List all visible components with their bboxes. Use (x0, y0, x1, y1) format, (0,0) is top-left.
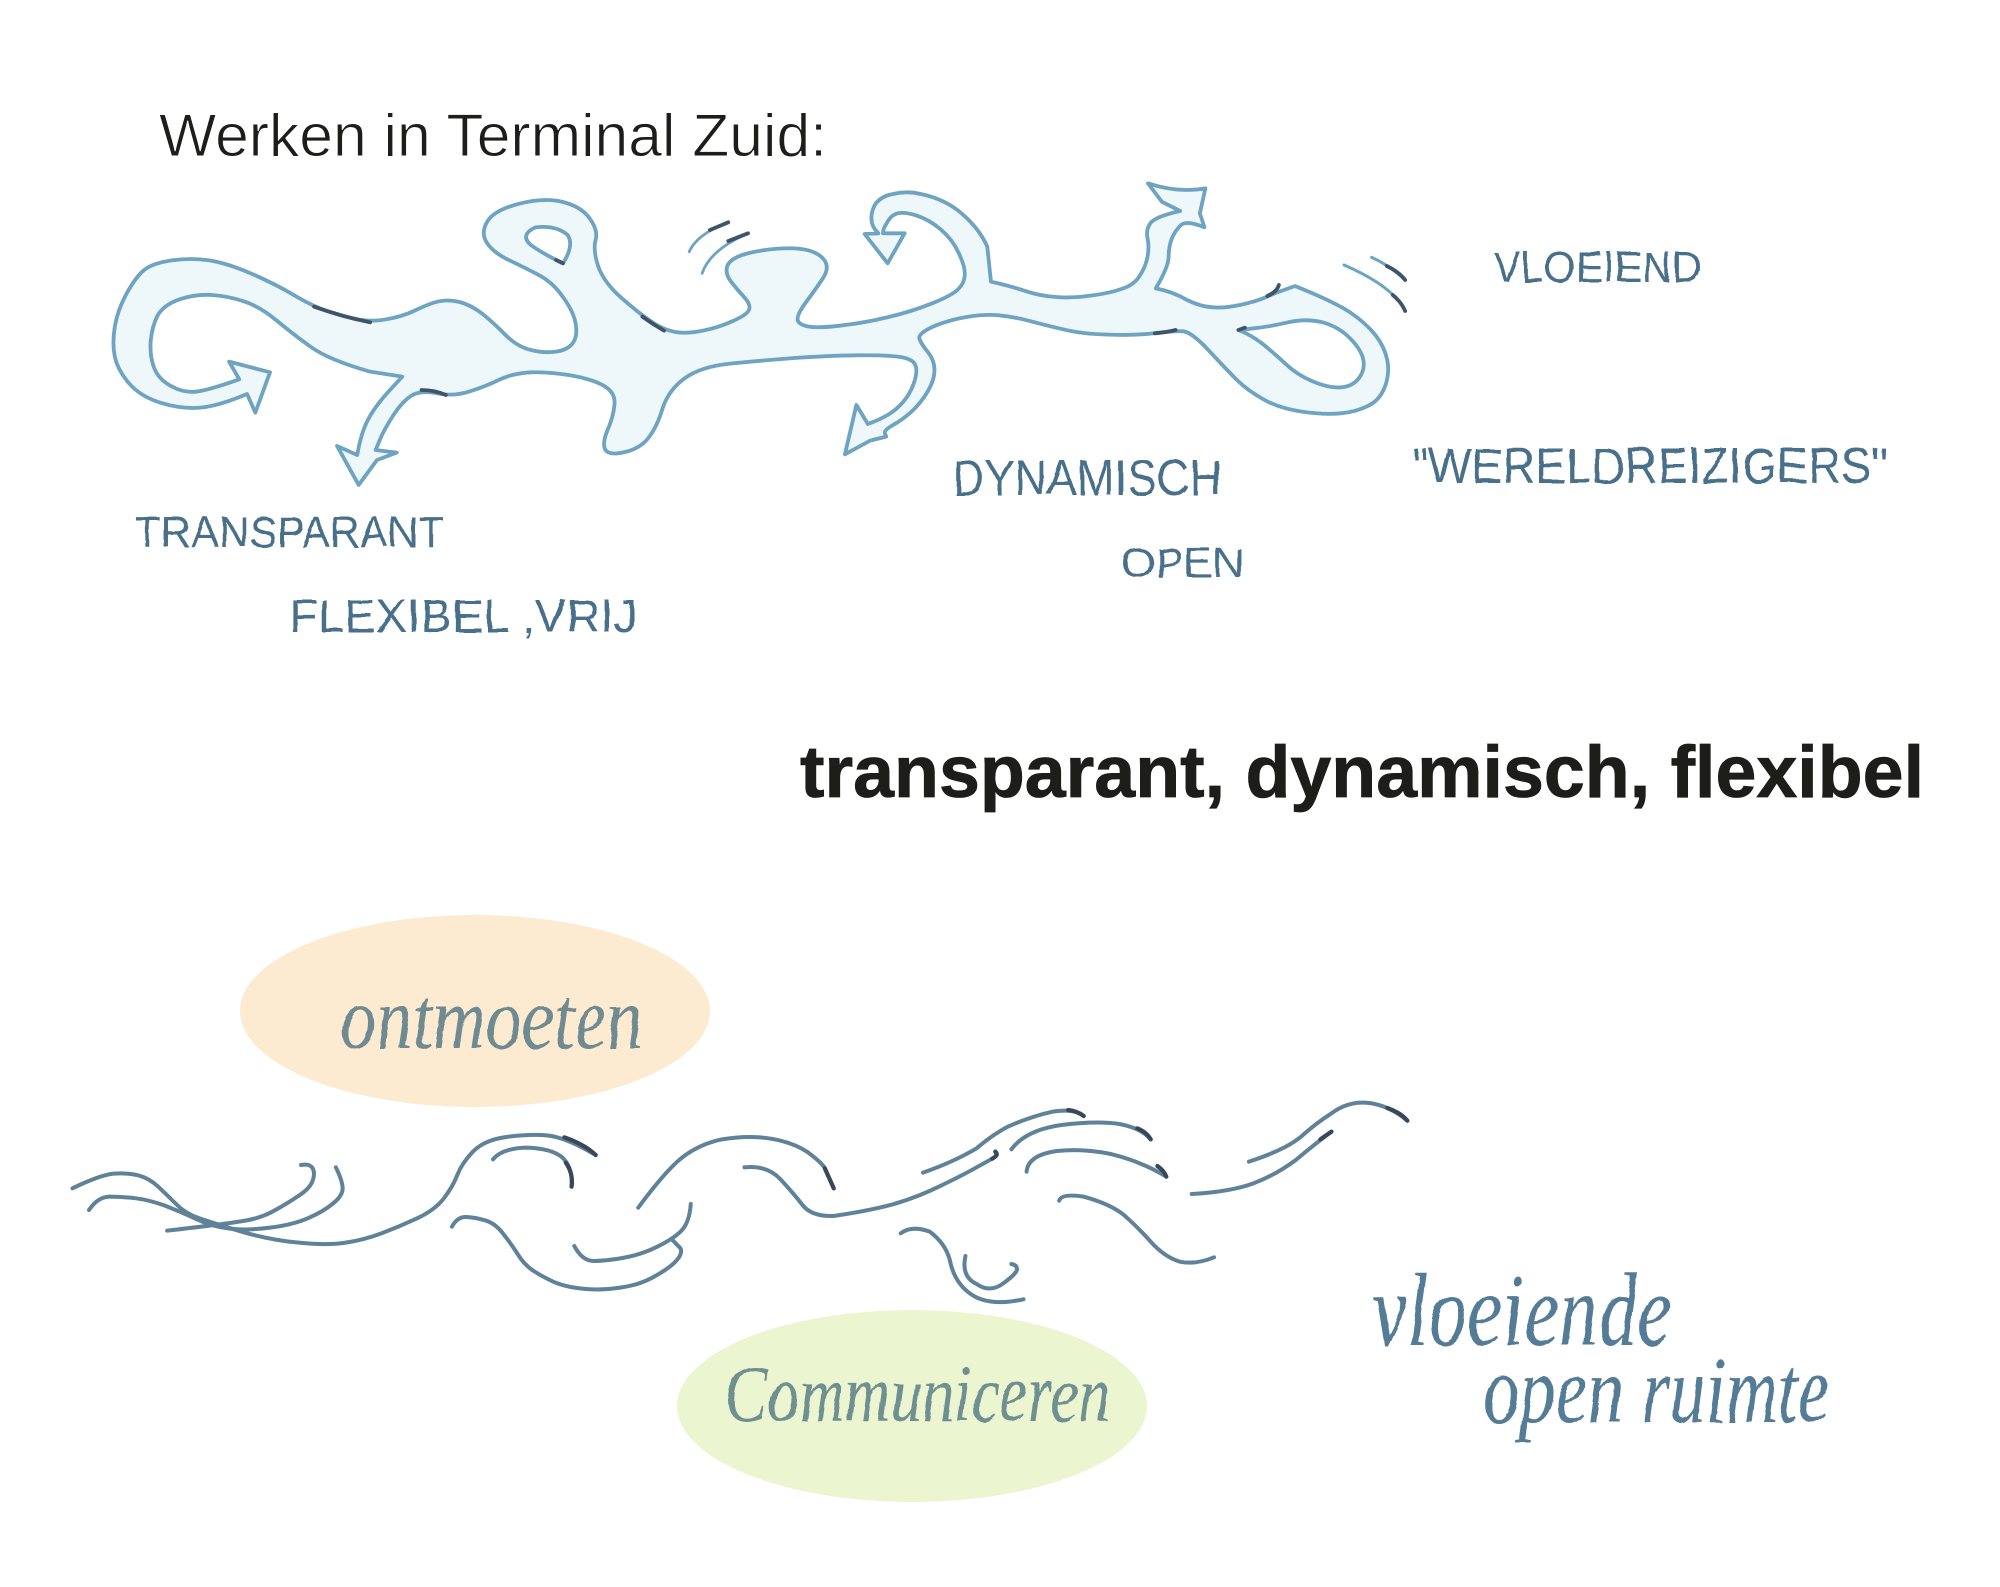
motion marks: right (1344, 257, 1405, 311)
subheading: transparant, dynamisch, flexibel (800, 732, 1924, 813)
label: wereldreizigers: "WERELDREIZIGERS" (1412, 438, 1888, 494)
handwritten word: ontmoeten: ontmoeten (340, 971, 643, 1068)
label: flexibel, vrij: FLEXIBEL ,VRIJ (289, 590, 637, 642)
label: transparant: TRANSPARANT (135, 508, 444, 557)
flow diagram: branching stream shape (113, 183, 1405, 485)
ellipse: ontmoeten (240, 915, 710, 1107)
ellipse: communiceren (677, 1310, 1147, 1502)
stream outline (113, 183, 1388, 485)
handwritten word: communiceren: Communiceren (725, 1348, 1110, 1439)
handwritten note (1372, 1253, 1830, 1443)
flowing lines: left group (72, 1135, 691, 1289)
label: open: OPEN (1121, 539, 1244, 586)
motion marks: top (689, 222, 748, 273)
note line: open ruimte: open ruimte (1483, 1336, 1830, 1443)
title: Werken in Terminal Zuid: (159, 102, 827, 169)
note line: vloeiende: vloeiende (1372, 1253, 1672, 1368)
flowing lines: right group (638, 1103, 1407, 1302)
small loop opening (526, 227, 570, 263)
dark pen accents (314, 260, 1279, 395)
label: dynamisch: DYNAMISCH (952, 450, 1222, 506)
right loop opening (1238, 320, 1364, 387)
label: vloeiend: VLOEIEND (1493, 243, 1702, 292)
